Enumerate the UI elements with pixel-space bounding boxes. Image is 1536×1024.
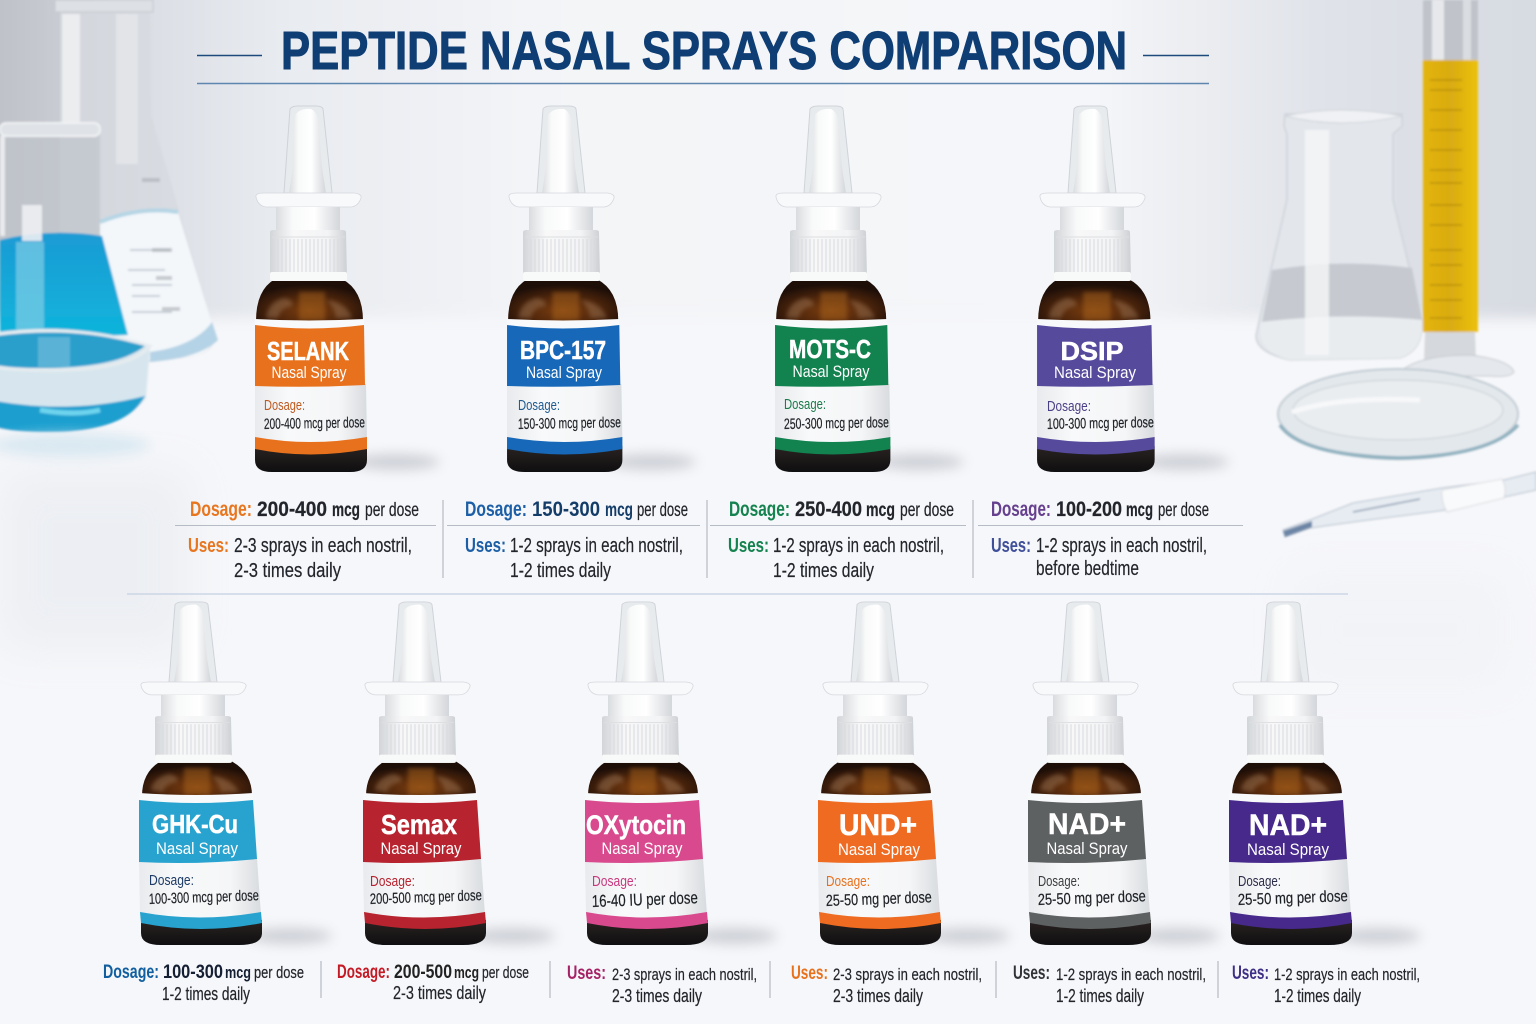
info: BPC-157: mcg: [605, 500, 633, 521]
bottle: NAD+ purple: 25-50 mg per dose: [1238, 888, 1348, 909]
info: SELANK: Uses:: [188, 535, 229, 557]
info: BPC-157: [465, 498, 688, 582]
back flask: [55, 0, 218, 362]
info: MOTS-C: 1-2 times daily: [773, 560, 874, 582]
info: DSIP: Uses:: [991, 535, 1031, 557]
info: DSIP: 100-200: [1056, 498, 1122, 521]
bottle: Semax: Nasal Spray: [380, 839, 462, 858]
info: Oxytocin: 2-3 times daily: [612, 986, 702, 1006]
info: Oxytocin: 2-3 sprays in each nostril,: [612, 965, 757, 984]
info: DSIP: [991, 498, 1209, 580]
info: BPC-157: 1-2 sprays in each nostril,: [510, 535, 683, 557]
bottle: SELANK: Dosage:: [264, 397, 305, 414]
info: DSIP: before bedtime: [1036, 558, 1139, 580]
info: SELANK: [188, 498, 419, 582]
bottle: MOTS-C: Dosage:: [784, 396, 826, 413]
info: Oxytocin: Uses:: [567, 963, 606, 984]
info: MOTS-C: per dose: [900, 500, 954, 521]
info: BPC-157: Dosage:: [465, 498, 527, 521]
bottle: GHK-Cu: 100-300 mcg per dose: [149, 887, 259, 908]
info: DSIP: mcg: [1126, 500, 1153, 521]
info: NAD+ grey: [1013, 963, 1206, 1006]
info: BPC-157: 150-300: [532, 498, 600, 521]
bottle: MOTS-C: [775, 106, 964, 472]
bottle: Semax: [363, 602, 555, 945]
lab glassware right: [1256, 0, 1536, 537]
info: SELANK: 2-3 sprays in each nostril,: [234, 535, 412, 557]
info: Oxytocin: [567, 963, 757, 1006]
bottle: NAD+ purple: Dosage:: [1238, 873, 1281, 890]
bottle: NAD+ purple: Nasal Spray: [1247, 840, 1329, 859]
bottle: Semax: Dosage:: [370, 873, 415, 890]
info: BPC-157: 1-2 times daily: [510, 560, 611, 582]
bottle: DSIP: Nasal Spray: [1054, 363, 1136, 382]
bottle: Oxytocin: Dosage:: [592, 873, 637, 890]
info: MOTS-C: mcg: [866, 500, 895, 521]
bottle: DSIP: [1037, 106, 1229, 472]
info: UND+: [791, 963, 982, 1006]
bottle: BPC-157: 150-300 mcg per dose: [518, 414, 621, 433]
bottle: NAD+ grey: Nasal Spray: [1046, 839, 1128, 858]
bottle: UND+: Nasal Spray: [838, 840, 920, 859]
info: MOTS-C: 250-400: [795, 498, 862, 521]
info: MOTS-C: 1-2 sprays in each nostril,: [773, 535, 944, 557]
info: SELANK: per dose: [365, 500, 419, 521]
info: MOTS-C: Dosage:: [729, 498, 790, 521]
info: NAD+ purple: 1-2 sprays in each nostril,: [1274, 965, 1420, 984]
bottle: SELANK: Nasal Spray: [272, 363, 347, 382]
bottle: BPC-157: [507, 106, 696, 472]
info: SELANK: Dosage:: [190, 498, 252, 521]
bottle: Oxytocin: Nasal Spray: [602, 839, 683, 858]
title: PEPTIDE NASAL SPRAYS COMPARISON: [281, 21, 1127, 81]
bottle: NAD+ grey: NAD+: [1048, 808, 1126, 841]
blue dish: [0, 330, 150, 432]
bottle: UND+: [818, 602, 1010, 945]
info: Semax: Dosage:: [337, 962, 390, 983]
bottle: Semax: Semax: [381, 809, 457, 840]
info: DSIP: 1-2 sprays in each nostril,: [1036, 535, 1207, 557]
info: NAD+ purple: Uses:: [1232, 963, 1269, 984]
bottle: SELANK: 200-400 mcg per dose: [264, 414, 365, 433]
info: DSIP: per dose: [1158, 500, 1209, 521]
bottle: Oxytocin: 16-40 IU per dose: [591, 888, 698, 911]
bottle: NAD+ grey: Dosage:: [1038, 873, 1080, 890]
bottle: BPC-157: BPC-157: [520, 335, 606, 365]
info: MOTS-C: [728, 498, 954, 582]
info: UND+: 2-3 sprays in each nostril,: [833, 965, 982, 984]
info: GHK-Cu: 100-300: [163, 962, 223, 983]
bottle: BPC-157: Nasal Spray: [526, 363, 602, 382]
row 2 dividers: [321, 961, 1218, 998]
front flask with blue liquid: [0, 123, 128, 340]
info: GHK-Cu: per dose: [254, 963, 304, 982]
info: NAD+ purple: [1232, 963, 1420, 1006]
bottle: Oxytocin: [585, 602, 777, 945]
info: NAD+ grey: Uses:: [1013, 963, 1050, 984]
lab glassware left: [0, 0, 218, 457]
info: Semax: mcg: [454, 963, 479, 982]
bottle: SELANK: [255, 106, 440, 472]
bottle: MOTS-C: MOTS-C: [789, 334, 871, 364]
bottle: DSIP: DSIP: [1060, 336, 1124, 366]
pipette: [1283, 472, 1536, 537]
info: BPC-157: per dose: [637, 500, 688, 521]
bottle: GHK-Cu: Dosage:: [149, 872, 194, 889]
bottle: UND+: UND+: [839, 809, 917, 842]
info: GHK-Cu: mcg: [225, 963, 251, 982]
info: UND+: Uses:: [791, 963, 828, 984]
info: Semax: per dose: [482, 963, 529, 982]
info: NAD+ purple: 1-2 times daily: [1274, 986, 1361, 1006]
bottle: NAD+ purple: NAD+: [1249, 809, 1327, 842]
info: Semax: 200-500: [394, 962, 452, 983]
bottle: MOTS-C: 250-300 mcg per dose: [784, 414, 889, 433]
petri dish: [1278, 369, 1518, 459]
bottle: UND+: Dosage:: [826, 873, 870, 890]
bottle: Oxytocin: OXytocin: [586, 810, 686, 840]
info: SELANK: mcg: [332, 500, 360, 521]
info: GHK-Cu: Dosage:: [103, 962, 159, 983]
info: Semax: [337, 962, 529, 1003]
bottle: GHK-Cu: [139, 602, 332, 945]
bottle: UND+: 25-50 mg per dose: [826, 889, 932, 910]
bottle: NAD+ grey: 25-50 mg per dose: [1038, 888, 1146, 909]
graduated cylinder: [1405, 0, 1514, 376]
bottle: SELANK: SELANK: [267, 336, 349, 366]
bottle: DSIP: Dosage:: [1047, 398, 1091, 415]
info: UND+: 2-3 times daily: [833, 986, 923, 1006]
info: MOTS-C: Uses:: [728, 535, 769, 557]
info: SELANK: 2-3 times daily: [234, 560, 341, 582]
row 1 dividers: [127, 500, 1348, 594]
info: SELANK: 200-400: [257, 498, 327, 521]
bottle: GHK-Cu: Nasal Spray: [156, 839, 238, 858]
info: GHK-Cu: 1-2 times daily: [162, 984, 250, 1004]
info: Semax: 2-3 times daily: [393, 983, 486, 1003]
info: NAD+ grey: 1-2 sprays in each nostril,: [1056, 965, 1206, 984]
info: GHK-Cu: [103, 962, 304, 1004]
bottle: BPC-157: Dosage:: [518, 397, 560, 414]
bottle: MOTS-C: Nasal Spray: [792, 362, 870, 381]
info: BPC-157: Uses:: [465, 535, 506, 557]
bottle: Semax: 200-500 mcg per dose: [370, 887, 482, 908]
info: NAD+ grey: 1-2 times daily: [1056, 986, 1144, 1006]
bottle: DSIP: 100-300 mcg per dose: [1047, 414, 1154, 433]
clear flask: [1256, 110, 1422, 360]
bottle: NAD+ purple: [1229, 602, 1421, 945]
bottle: GHK-Cu: GHK-Cu: [152, 809, 238, 839]
bottle: NAD+ grey: [1028, 602, 1220, 945]
info: DSIP: Dosage:: [991, 498, 1051, 521]
